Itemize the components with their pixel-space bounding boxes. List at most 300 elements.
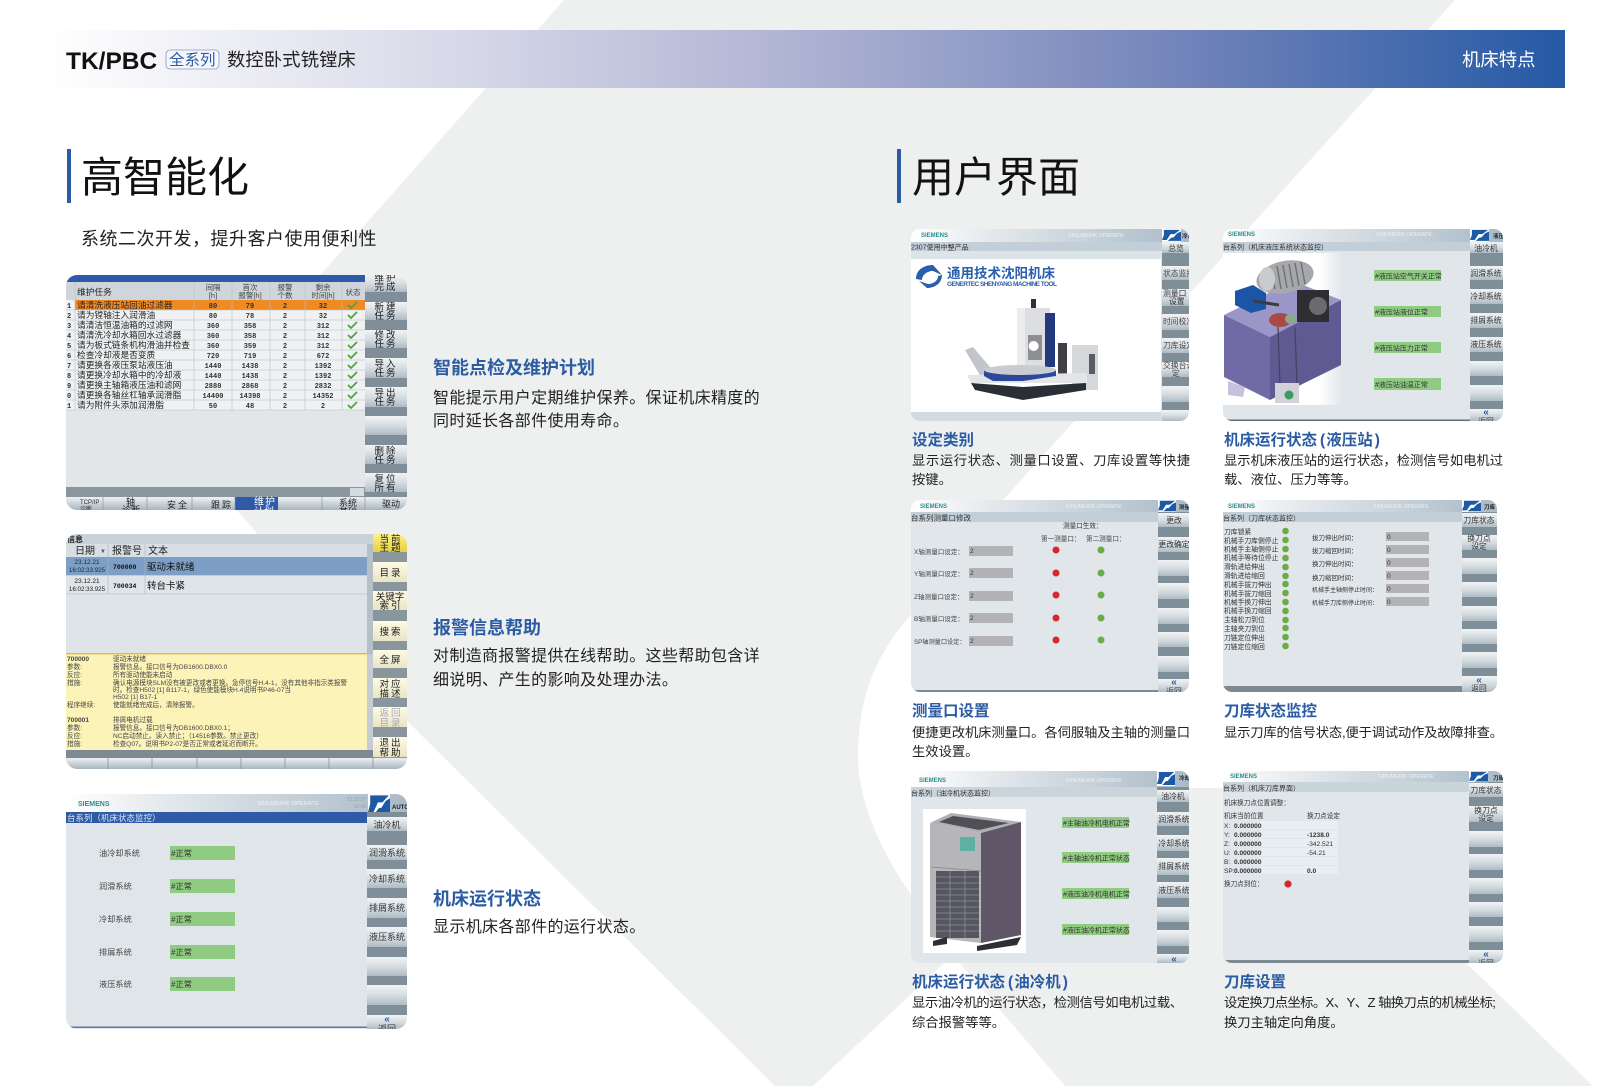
company logo bbox=[916, 265, 1057, 288]
maintenance table rows: 1 bbox=[67, 403, 71, 411]
panel: machine status screen: 台系列（机床状态监控） bbox=[67, 813, 161, 823]
status rows bbox=[99, 846, 235, 991]
company logo: GENERTEC SHENYANG MACHINE TOOL bbox=[947, 281, 1057, 288]
softkey column: « bbox=[1476, 675, 1482, 686]
softkey column: 导出 bbox=[374, 387, 398, 399]
softkey column: 测量口 bbox=[1163, 289, 1186, 298]
softkey column bbox=[367, 812, 407, 1034]
panel: maintenance plan screen: [h] bbox=[209, 291, 217, 300]
maintenance table rows: 719 bbox=[244, 353, 256, 361]
softkey column: 维护 bbox=[374, 272, 398, 284]
softkey column: 更改 bbox=[1166, 515, 1182, 525]
softkey column: 冷却系统 bbox=[1470, 291, 1502, 301]
signal list: 主轴松刀到位 bbox=[1224, 615, 1265, 624]
alarm help text: 程序继续: bbox=[67, 700, 95, 709]
softkey column: 删除 bbox=[374, 445, 398, 457]
timing fields: 机械手刀库侧停止时间： bbox=[1312, 599, 1378, 607]
panel: maintenance plan screen: 间隔 bbox=[206, 283, 221, 292]
softkey column: 索引 bbox=[379, 600, 403, 612]
maintenance table rows: 1438 bbox=[242, 373, 258, 381]
chiller status labels: #主轴油冷机电机正常 bbox=[1063, 818, 1130, 828]
measuring port rows: B轴测量口设定： bbox=[914, 614, 964, 623]
softkey column: 油冷机 bbox=[1474, 243, 1498, 253]
maintenance table rows: 1392 bbox=[315, 363, 331, 371]
text: setting category: 显示运行状态、测量口设置、刀库设置等快捷 bbox=[912, 452, 1190, 468]
signal list bbox=[1224, 527, 1279, 651]
maintenance table rows: 1438 bbox=[242, 363, 258, 371]
tool change coordinates: 换刀点设定 bbox=[1307, 811, 1340, 820]
measuring port rows: X轴测量口设定： bbox=[914, 547, 964, 556]
tool change coordinates: 0.0 bbox=[1307, 868, 1316, 875]
softkey column: 搜索 bbox=[379, 626, 403, 638]
tool change coordinates: 0.000000 bbox=[1234, 868, 1262, 875]
panel: alarm help screen bbox=[66, 533, 407, 769]
tool change coordinates: -54.21 bbox=[1307, 850, 1326, 857]
softkey column: 油冷机 bbox=[1161, 791, 1185, 801]
softkey column: 排屑系统 bbox=[1158, 861, 1190, 871]
softkey column: 完成 bbox=[374, 281, 398, 293]
status check marks bbox=[348, 302, 357, 408]
maintenance table rows: 3 bbox=[67, 323, 71, 331]
panel: hydraulic station screen: 液压 bbox=[1493, 232, 1505, 240]
panel: machine status screen: SIEMENS bbox=[78, 801, 110, 808]
signal list: 滑轨进给伸出 bbox=[1224, 562, 1265, 571]
oil chiller illustration bbox=[930, 813, 1021, 951]
tool change coordinates bbox=[1224, 798, 1340, 888]
softkey column: 返回 bbox=[1471, 684, 1487, 693]
softkey column: 换刀点 bbox=[1474, 805, 1498, 815]
panel: oil chiller screen: SIEMENS bbox=[919, 778, 946, 784]
panel: setting category screen: SINUMERIK OPERATE bbox=[1068, 233, 1124, 239]
softkey column bbox=[1158, 512, 1190, 696]
tool change coordinates: 0.000000 bbox=[1234, 841, 1262, 848]
maintenance table rows: 1392 bbox=[315, 373, 331, 381]
text: maintenance feature: 智能点检及维护计划 bbox=[433, 357, 595, 378]
maintenance table rows: 0 bbox=[67, 393, 71, 401]
panel: oil chiller screen bbox=[911, 771, 1190, 965]
panel: measuring port screen: 第二测量口： bbox=[1086, 534, 1126, 543]
bottom tab bar: 系统 bbox=[339, 497, 357, 508]
signal list: 机械手等待位停止 bbox=[1224, 553, 1279, 562]
text: machine status feature bbox=[433, 888, 646, 936]
panel: maintenance plan screen bbox=[66, 272, 407, 518]
text: tool magazine setting: 设定换刀点坐标。X、Y、Z 轴换刀点的机械坐标; bbox=[1224, 995, 1496, 1010]
text: oil chiller bbox=[912, 972, 1183, 1030]
maintenance table rows: 2 bbox=[283, 343, 287, 351]
panel: setting category screen: 冷却 bbox=[1182, 232, 1194, 240]
softkey column: 对应 bbox=[379, 678, 403, 690]
tool change coordinates: Z: bbox=[1224, 841, 1230, 848]
hydraulic status labels: #液压站油温正常 bbox=[1375, 380, 1428, 389]
panel: machine status screen bbox=[66, 794, 409, 1034]
softkey column: 液压系统 bbox=[1470, 339, 1502, 349]
softkey column: 目录 bbox=[379, 568, 403, 579]
softkey column: 任务 bbox=[374, 454, 398, 466]
alarm help text: 驱动未就绪 bbox=[113, 654, 146, 663]
text: setting category: 设定类别 bbox=[912, 430, 974, 449]
status rows: 润滑系统 bbox=[99, 881, 132, 891]
maintenance table rows: 8 bbox=[67, 373, 71, 381]
alarm help text: 检查Q07。说明书P2-07是否正常或者延迟而断开。 bbox=[113, 739, 262, 748]
panel: tool change setting screen: SIEMENS bbox=[1230, 774, 1257, 780]
softkey column: 返回 bbox=[378, 1023, 396, 1034]
maintenance table rows: 80 bbox=[209, 313, 217, 321]
maintenance table rows: 7 bbox=[67, 363, 71, 371]
panel: machine status screen: AUTO bbox=[392, 805, 409, 811]
signal list: 刀链定位缩回 bbox=[1224, 642, 1265, 651]
measuring port rows: SP轴测量口设定： bbox=[914, 638, 966, 646]
measuring port rows: 2 bbox=[970, 570, 974, 577]
text: tool magazine setting bbox=[1224, 973, 1496, 1030]
signal list: 主轴夹刀到位 bbox=[1224, 624, 1265, 633]
text: hydraulic station: 载、液位、压力等等。 bbox=[1224, 471, 1357, 487]
alarm help text: 确认电源模块SLM没有被更改或者更换。急停信号H.4-1，没有其他非指示类报警 bbox=[113, 678, 347, 687]
tool change coordinates: 0.000000 bbox=[1234, 850, 1262, 857]
softkey column: 关键字 bbox=[376, 591, 404, 603]
maintenance table rows: 360 bbox=[207, 343, 219, 351]
softkey column: 润滑系统 bbox=[1158, 814, 1190, 824]
softkey column bbox=[1469, 782, 1503, 968]
softkey column: 任务 bbox=[374, 396, 398, 408]
maintenance table rows: 312 bbox=[317, 323, 329, 331]
panel: tool magazine status screen: 刀库 bbox=[1484, 503, 1496, 511]
softkey column: 任务 bbox=[374, 367, 398, 379]
softkey column: 任务 bbox=[374, 338, 398, 350]
maintenance table rows: 672 bbox=[317, 353, 329, 361]
alarm help text: 措施: bbox=[67, 678, 82, 687]
panel: maintenance plan screen: 首次 bbox=[242, 282, 258, 292]
panel: alarm help screen: 报警号 bbox=[112, 544, 142, 557]
softkey column: 油冷机 bbox=[373, 819, 401, 830]
tool change coordinates: 0.000000 bbox=[1234, 832, 1262, 839]
header product title: 数控卧式铣镗床 bbox=[227, 49, 356, 70]
softkey column bbox=[1462, 512, 1497, 693]
maintenance table rows: 请清洗冷却水箱回水过滤器 bbox=[77, 329, 182, 340]
tool change coordinates: 机床当前位置 bbox=[1224, 811, 1264, 820]
text: alarm help feature: 报警信息帮助 bbox=[433, 617, 541, 638]
softkey column bbox=[373, 533, 407, 759]
softkey column: 换刀点 bbox=[1467, 533, 1491, 543]
maintenance table rows: 2 bbox=[283, 333, 287, 341]
measuring port rows: 2 bbox=[970, 638, 974, 645]
alarm help text: 使能就绪完成后，清除报警。 bbox=[113, 700, 199, 709]
maintenance table rows: 32 bbox=[319, 303, 327, 311]
panel: measuring port screen: 测量口生效： bbox=[1063, 521, 1103, 530]
left section heading: 高智能化 bbox=[81, 154, 249, 201]
panel: maintenance plan screen: 报警[h] bbox=[238, 290, 262, 300]
alarm help text: 时。检查H502 [1] B117-1，绿色使能模块H.4说明书P46-07当 bbox=[113, 685, 291, 694]
header band bbox=[45, 30, 1565, 88]
panel: hydraulic station screen: SINUMERIK OPERATE bbox=[1376, 232, 1432, 238]
maintenance table rows: 80 bbox=[209, 303, 217, 311]
maintenance table rows: 请为附件头添加润滑脂 bbox=[77, 399, 164, 410]
hydraulic status labels: #液压站压力正常 bbox=[1375, 344, 1428, 352]
panel: tool magazine status screen bbox=[1223, 500, 1497, 693]
softkey column: 交换台设 bbox=[1163, 360, 1194, 370]
maintenance table rows: 6 bbox=[67, 353, 71, 361]
panel: alarm help screen: 文本 bbox=[148, 544, 168, 557]
text: oil chiller: 显示油冷机的运行状态，检测信号如电机过载、 bbox=[912, 995, 1183, 1010]
signal list: 刀库锁紧 bbox=[1224, 527, 1251, 536]
maintenance table rows: 14400 bbox=[202, 393, 224, 401]
softkey column bbox=[1470, 242, 1503, 426]
measuring port rows: Y轴测量口设定： bbox=[914, 569, 964, 578]
chiller status labels: #主轴油冷机正常状态 bbox=[1063, 854, 1130, 862]
text: setting category bbox=[912, 430, 1190, 487]
text: tool magazine setting: 刀库设置 bbox=[1224, 973, 1286, 991]
panel: measuring port screen: 台系列测量口修改 bbox=[911, 512, 971, 522]
panel: machine status screen: SINUMERIK OPERATE bbox=[257, 801, 319, 807]
panel: hydraulic station screen bbox=[1223, 229, 1504, 426]
panel: measuring port screen: 第一测量口： bbox=[1041, 534, 1081, 543]
status rows: #正常 bbox=[171, 848, 192, 858]
maintenance table rows: 2880 bbox=[205, 383, 221, 391]
maintenance table rows: 360 bbox=[207, 333, 219, 341]
maintenance table rows: 9 bbox=[67, 383, 71, 391]
text: hydraulic station: 机床运行状态(液压站) bbox=[1224, 430, 1380, 449]
measuring port rows: Z轴测量口设定： bbox=[914, 592, 963, 601]
softkey column: 更改确定 bbox=[1158, 539, 1190, 549]
alarm help text: 参数: bbox=[67, 723, 82, 732]
alarm help text: 报警信息。接口信号为DB1600.DBX0.1； bbox=[113, 723, 234, 732]
tool change coordinates: 0.000000 bbox=[1234, 823, 1262, 830]
panel: maintenance plan screen: 剩余 bbox=[316, 282, 331, 292]
panel: maintenance plan screen: 报警 bbox=[278, 282, 293, 292]
panel: measuring port screen: 测量 bbox=[1179, 503, 1191, 511]
signal list: 滑轨进给缩回 bbox=[1224, 571, 1265, 580]
bottom tab bar: 维护 bbox=[254, 495, 276, 508]
machine tool illustration bbox=[965, 299, 1098, 400]
maintenance table rows: 79 bbox=[246, 303, 254, 311]
maintenance table rows: 2 bbox=[283, 353, 287, 361]
text: hydraulic station: 显示机床液压站的运行状态，检测信号如电机过 bbox=[1224, 453, 1503, 468]
softkey column: 目录 bbox=[379, 718, 403, 729]
maintenance table rows: 358 bbox=[244, 323, 256, 331]
alarm help text: 700000 bbox=[67, 656, 89, 663]
maintenance table rows: 检查冷却液是否变质 bbox=[77, 349, 156, 360]
timing fields: 0 bbox=[1387, 573, 1391, 580]
left section subtitle: 系统二次开发，提升客户使用便利性 bbox=[81, 229, 377, 249]
softkey column: 冷却系统 bbox=[1158, 838, 1190, 848]
maintenance table rows: 请更换各液压泵站液压油 bbox=[77, 359, 173, 370]
text: machine status feature: 显示机床各部件的运行状态。 bbox=[433, 918, 646, 936]
softkey column: 润滑系统 bbox=[1470, 268, 1502, 278]
alarm help text: 参数: bbox=[67, 662, 82, 671]
softkey column: 冷却系统 bbox=[369, 873, 405, 884]
text: tool magazine status: 显示刀库的信号状态,便于调试动作及故障排查。 bbox=[1224, 725, 1503, 740]
softkey column: « bbox=[1171, 677, 1177, 688]
panel: machine status screen: 12:43 bbox=[353, 804, 366, 810]
text: tool magazine setting: 换刀主轴定向角度。 bbox=[1224, 1015, 1344, 1030]
status rows: 排屑系统 bbox=[99, 947, 132, 957]
text: alarm help feature bbox=[433, 617, 760, 689]
softkey column: 全屏 bbox=[379, 654, 403, 666]
status rows: 油冷却系统 bbox=[99, 848, 140, 858]
panel: machine status screen: 23.12.27 bbox=[347, 797, 366, 803]
maintenance table rows: 请更换冷却水箱中的冷却液 bbox=[77, 369, 182, 380]
tool change coordinates: 机床换刀点位置调整： bbox=[1224, 798, 1290, 807]
alarm help text: 所有驱动使能未启动 bbox=[113, 670, 173, 679]
signal status dots bbox=[1282, 528, 1289, 649]
softkey column bbox=[1162, 242, 1189, 421]
text: alarm help feature: 对制造商报警提供在线帮助。这些帮助包含详 bbox=[433, 647, 760, 665]
softkey column: 状态监控 bbox=[1163, 268, 1194, 278]
chiller status labels: #液压油冷机电机正常 bbox=[1063, 890, 1130, 898]
maintenance table rows: 2 bbox=[283, 393, 287, 401]
panel: alarm help screen: 信息 bbox=[67, 534, 83, 544]
maintenance table rows: 请清洁恒温油箱的过滤网 bbox=[77, 319, 173, 330]
softkey column: 帮助 bbox=[379, 747, 403, 759]
timing fields: 0 bbox=[1387, 586, 1391, 593]
alarm rows: 23.12.21 bbox=[74, 559, 100, 566]
panel: maintenance plan screen: 个数 bbox=[278, 290, 293, 300]
panel: tool change setting screen: 台系列（机床刀库界面） bbox=[1223, 784, 1300, 792]
softkey column: 刀库状态 bbox=[1470, 785, 1502, 795]
text: alarm help feature: 细说明、产生的影响及处理办法。 bbox=[433, 671, 678, 689]
timing fields: 0 bbox=[1387, 534, 1391, 541]
softkey column: 定 bbox=[1172, 368, 1180, 378]
softkey column: 液压系统 bbox=[369, 931, 405, 942]
measuring port rows: 2 bbox=[970, 548, 974, 555]
timing fields: 换刀缩回时间： bbox=[1312, 573, 1358, 582]
status rows: #正常 bbox=[171, 979, 192, 989]
panel: alarm help screen: 日期 bbox=[75, 545, 95, 557]
text: oil chiller: 综合报警等等。 bbox=[912, 1014, 1005, 1030]
maintenance table rows bbox=[67, 299, 334, 411]
tool change coordinates: 换刀点到位： bbox=[1224, 879, 1264, 888]
alarm rows: 驱动未就绪 bbox=[147, 561, 195, 573]
panel: hydraulic station screen: 台系列（机床液压系统状态监控） bbox=[1223, 242, 1328, 252]
maintenance table rows: 2 bbox=[283, 373, 287, 381]
hydraulic status labels: #液压站液位正常 bbox=[1375, 308, 1428, 316]
measuring port rows: 2 bbox=[970, 593, 974, 600]
alarm rows: 23.12.21 bbox=[74, 578, 100, 585]
signal list: 机械手刀库侧停止 bbox=[1224, 536, 1279, 545]
maintenance table rows: 312 bbox=[317, 333, 329, 341]
timing fields: 0 bbox=[1387, 599, 1391, 606]
tool change coordinates: Y: bbox=[1224, 832, 1230, 839]
panel: oil chiller screen: 冷却 bbox=[1179, 774, 1191, 782]
signal list: 机械手换刀伸出 bbox=[1224, 598, 1272, 606]
bottom tab bar: 驱动 bbox=[382, 499, 400, 509]
maintenance table rows: 2 bbox=[283, 313, 287, 321]
softkey column: 总览 bbox=[1168, 243, 1184, 253]
timing fields bbox=[1312, 532, 1429, 607]
softkey column: « bbox=[1171, 954, 1177, 965]
softkey column: 设定 bbox=[1471, 541, 1487, 551]
signal list: 机械手主轴侧停止 bbox=[1224, 544, 1279, 554]
maintenance table rows: 2 bbox=[283, 303, 287, 311]
tool change coordinates: U: bbox=[1224, 850, 1231, 857]
alarm help text: 措施: bbox=[67, 739, 82, 748]
text: maintenance feature: 同时延长各部件使用寿命。 bbox=[433, 412, 629, 430]
softkey column: 润滑系统 bbox=[369, 847, 405, 858]
text: tool magazine status bbox=[1224, 701, 1503, 740]
softkey column: 设定 bbox=[1478, 813, 1494, 823]
softkey column: 刀库状态 bbox=[1463, 515, 1495, 525]
panel: maintenance plan screen: 状态 bbox=[346, 287, 361, 297]
signal list: 机械手拔刀缩回 bbox=[1224, 589, 1272, 598]
maintenance table rows: 2 bbox=[283, 323, 287, 331]
timing fields: 0 bbox=[1387, 560, 1391, 567]
timing fields: 机械手主轴侧停止时间： bbox=[1312, 586, 1378, 594]
alarm help text: H502 [1] B17-1 bbox=[113, 694, 158, 701]
softkey column: 排屑系统 bbox=[369, 902, 405, 913]
company logo: 通用技术沈阳机床 bbox=[947, 265, 1055, 281]
panel: setting category screen: 2307使用中整产品 bbox=[911, 242, 969, 252]
status rows: 液压系统 bbox=[99, 979, 132, 989]
bottom tab bar bbox=[66, 496, 407, 510]
bottom tab bar: 诊断 bbox=[122, 504, 140, 515]
text: maintenance feature bbox=[433, 357, 760, 430]
panel: tool change setting screen: SINUMERIK OPERATE bbox=[1378, 774, 1434, 780]
maintenance table rows: 1440 bbox=[205, 363, 221, 371]
signal list: 机械手拔刀伸出 bbox=[1224, 580, 1272, 589]
chiller status labels: #液压油冷机正常状态 bbox=[1063, 926, 1130, 934]
tool change coordinates: SP: bbox=[1224, 868, 1235, 875]
softkey column: 任务 bbox=[374, 310, 398, 322]
panel: tool change setting screen bbox=[1223, 771, 1504, 968]
maintenance table rows: 14398 bbox=[239, 393, 261, 401]
text: measuring port: 测量口设置 bbox=[912, 702, 990, 720]
alarm help text: 排屑电机过载 bbox=[113, 715, 153, 724]
chiller status labels bbox=[1062, 817, 1130, 935]
alarm rows: 16:02:33.925 bbox=[69, 586, 106, 593]
softkey column: 排屑系统 bbox=[1470, 315, 1502, 325]
hydraulic pump illustration bbox=[1224, 255, 1341, 403]
softkey column: 修改 bbox=[374, 329, 398, 341]
panel: measuring port screen: SINUMERIK OPERATE bbox=[1066, 504, 1122, 510]
bottom tab bar: TCP/IP bbox=[80, 500, 99, 506]
alarm help text bbox=[67, 654, 347, 748]
maintenance table rows: 2 bbox=[283, 403, 287, 411]
softkey column: 返回 bbox=[379, 707, 403, 719]
maintenance table rows: 请为镗轴注入润滑油 bbox=[77, 309, 155, 320]
timing fields: 换刀伸出时间： bbox=[1312, 559, 1358, 568]
signal list: 机械手换刀缩回 bbox=[1224, 606, 1272, 615]
panel: tool magazine status screen: SIEMENS bbox=[1228, 504, 1255, 510]
softkey column: « bbox=[1483, 949, 1489, 960]
panel: alarm help screen: ▼ bbox=[100, 549, 106, 555]
text: setting category: 按键。 bbox=[912, 472, 952, 487]
panel: hydraulic station screen: SIEMENS bbox=[1228, 232, 1255, 238]
text: oil chiller: 机床运行状态(油冷机) bbox=[912, 972, 1068, 991]
text: maintenance feature: 智能提示用户定期维护保养。保证机床精度的 bbox=[433, 389, 760, 407]
bottom tab bar: 基础 bbox=[339, 506, 357, 517]
bottom tab bar: 跟踪 bbox=[211, 499, 233, 510]
alarm rows: 16:02:33.925 bbox=[69, 567, 106, 574]
timing fields: 拔刀伸出时间： bbox=[1312, 533, 1358, 542]
softkey column: 返回 bbox=[1166, 687, 1182, 696]
text: measuring port: 生效设置。 bbox=[912, 744, 978, 759]
alarm rows bbox=[69, 559, 195, 593]
softkey column: 时间校准 bbox=[1163, 316, 1194, 326]
maintenance table rows: 请清洗液压站回油过滤器 bbox=[77, 299, 173, 310]
bottom tab bar: 计划 bbox=[254, 505, 274, 518]
softkey column: « bbox=[384, 1014, 390, 1025]
panel: setting category screen bbox=[911, 229, 1194, 421]
maintenance table rows: 359 bbox=[244, 343, 256, 351]
tool change coordinates: -342.521 bbox=[1307, 841, 1333, 848]
alarm help text: 反应: bbox=[67, 670, 82, 679]
bottom tab bar: 诊断 bbox=[80, 505, 92, 513]
softkey column bbox=[365, 272, 407, 510]
header model name: TK/PBC bbox=[66, 48, 158, 75]
maintenance table rows: 14352 bbox=[312, 393, 334, 401]
text: measuring port bbox=[912, 702, 1190, 759]
maintenance table rows: 360 bbox=[207, 323, 219, 331]
maintenance table rows: 50 bbox=[209, 403, 217, 411]
